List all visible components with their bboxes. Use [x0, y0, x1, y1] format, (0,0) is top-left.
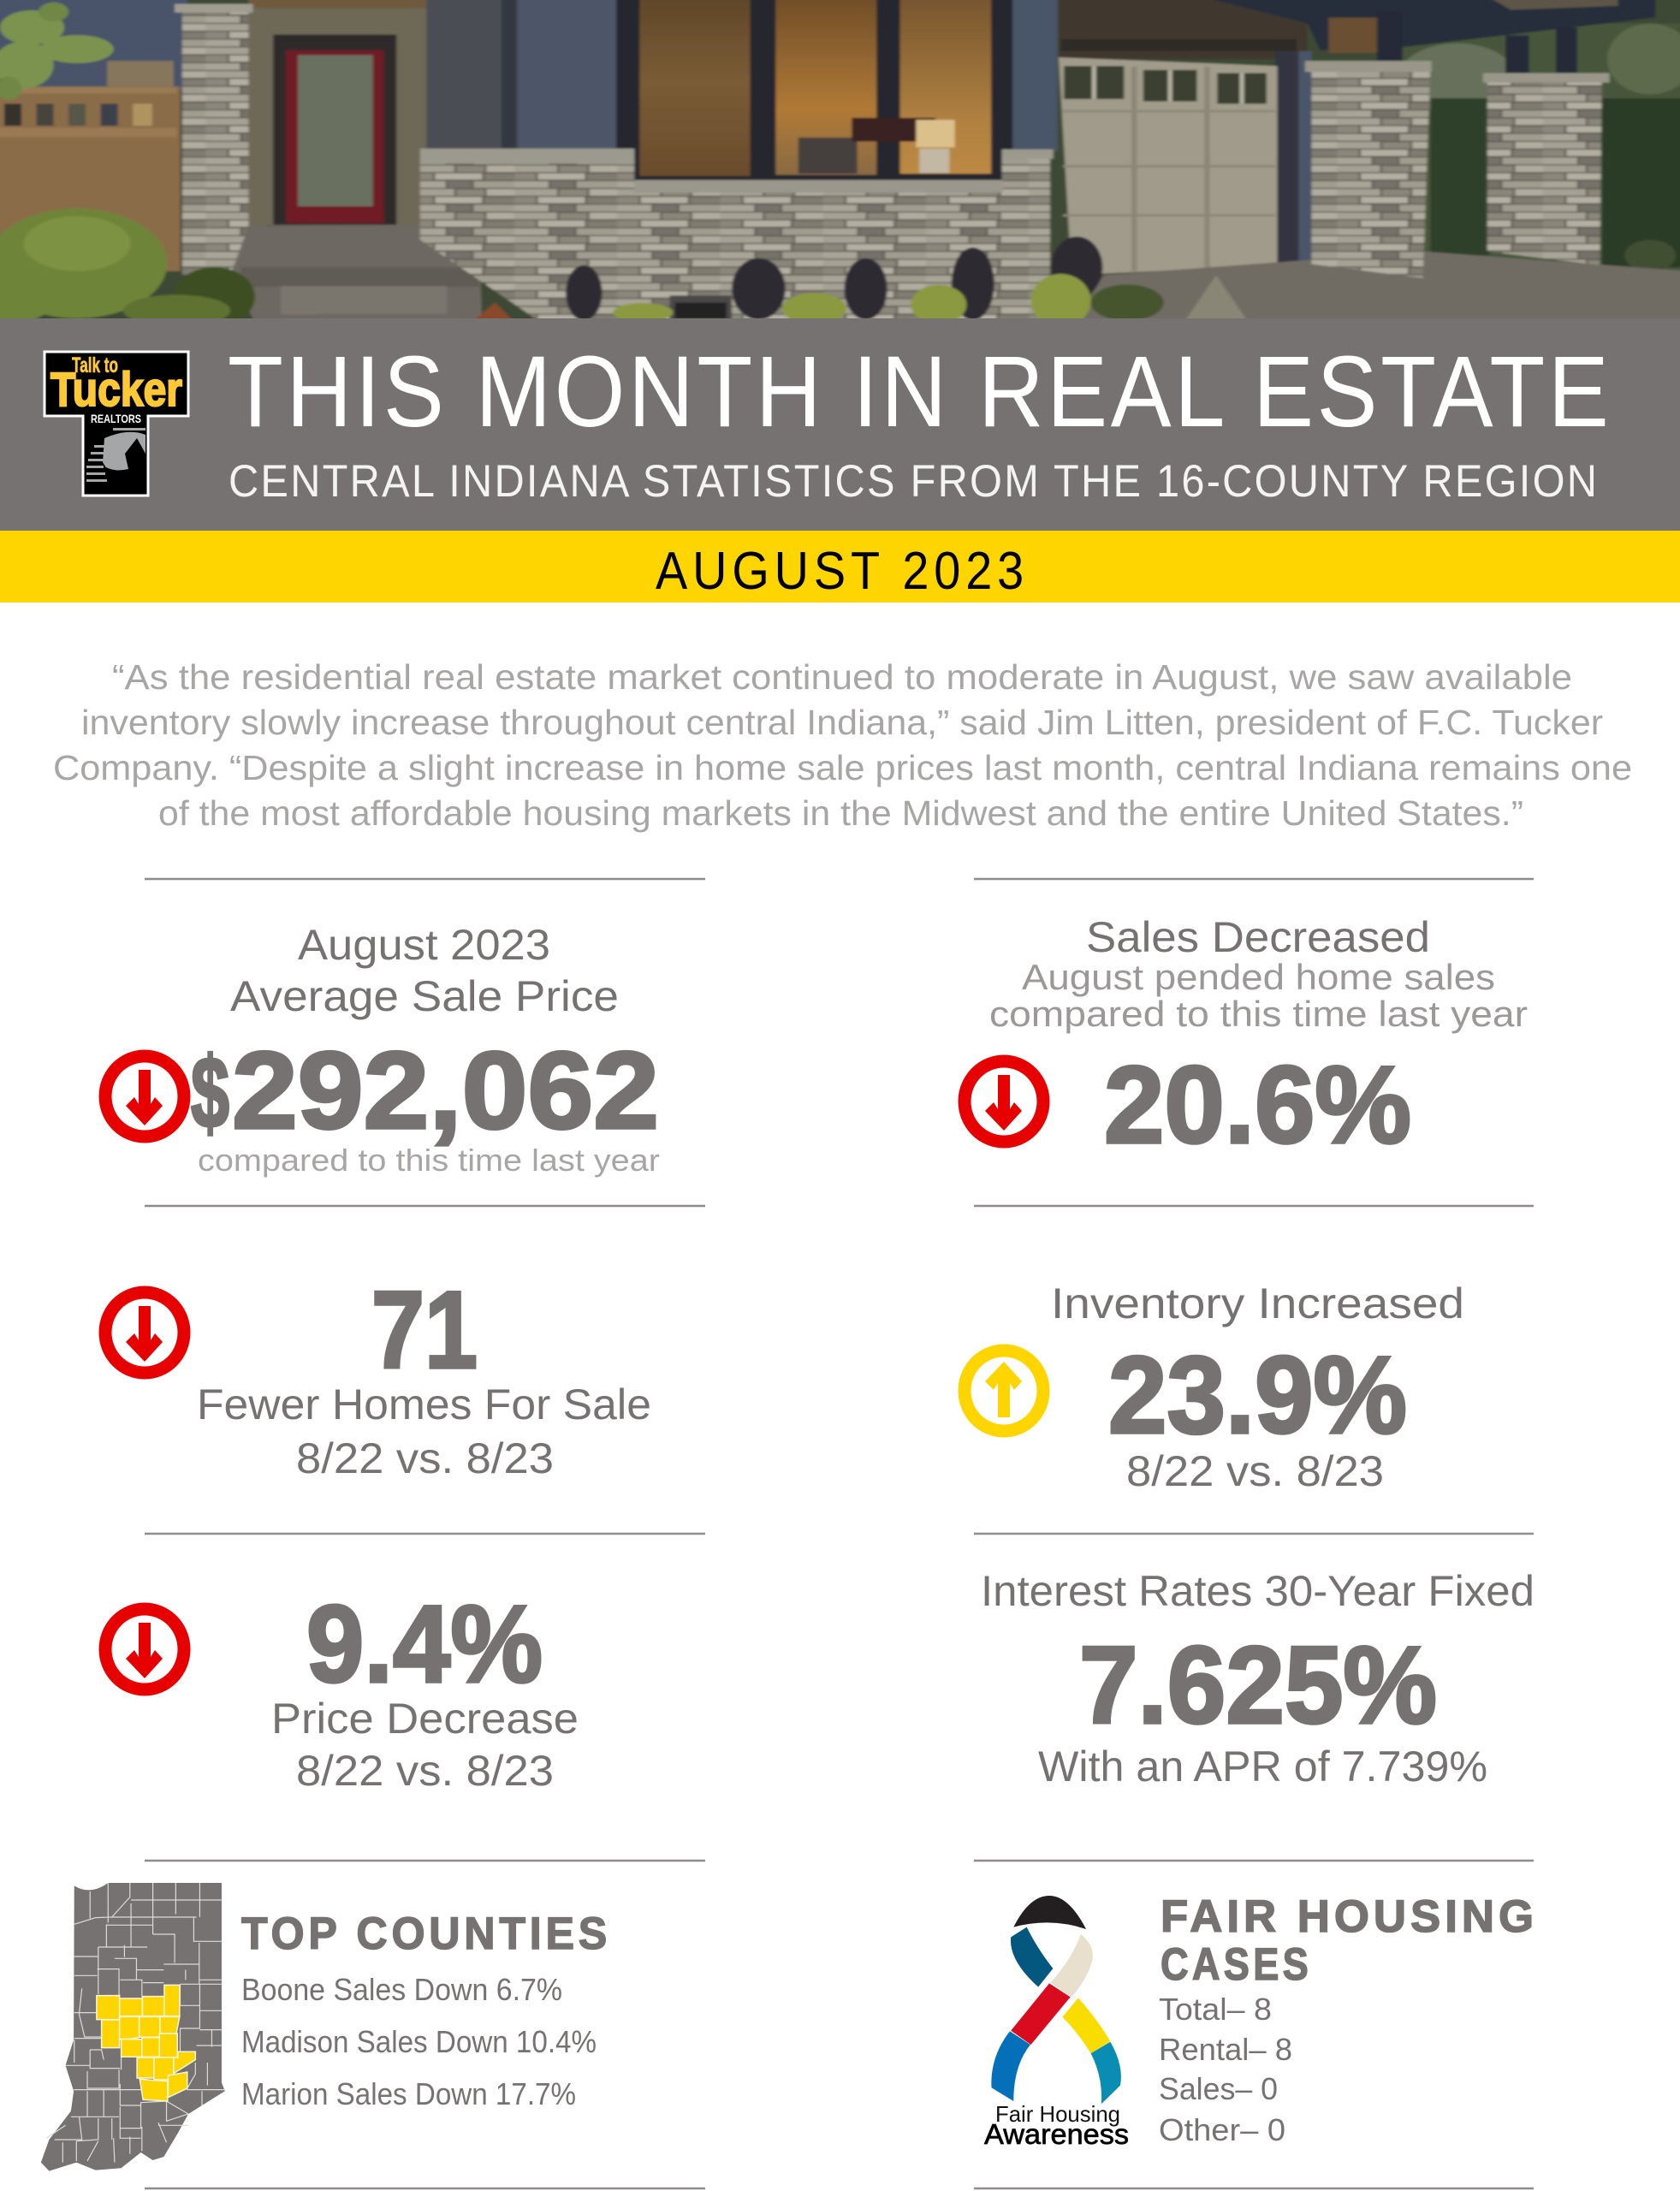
panel: average sale price: compared to this time last year	[198, 1143, 660, 1178]
percent value: 20.6%	[1104, 1044, 1411, 1167]
panel: price decrease	[105, 1583, 579, 1795]
panel: fair housing cases: Total– 8	[1159, 1992, 1272, 2027]
panel: fair housing cases: Sales– 0	[1159, 2071, 1278, 2106]
panel: sales decreased: compared to this time last year	[989, 994, 1528, 1034]
panel: average sale price: August 2023	[298, 921, 550, 969]
panel: sales decreased	[965, 913, 1528, 1167]
logo: Talk to Tucker Realtors	[45, 352, 188, 496]
icon: yellow up arrow	[965, 1351, 1043, 1431]
panel: fair housing cases: Other– 0	[1159, 2112, 1285, 2147]
heading	[1161, 1891, 1538, 1990]
intro quote: “As the residential real estate market continued to moderate in August, we saw available	[112, 657, 1572, 697]
panel: fair housing cases	[984, 1891, 1538, 2150]
panel: sales decreased: Sales Decreased	[1086, 913, 1430, 961]
panel: inventory increased: 8/22 vs. 8/23	[1126, 1447, 1384, 1495]
panel: fewer homes for sale: 8/22 vs. 8/23	[296, 1434, 554, 1482]
icon: red down arrow	[105, 1056, 184, 1137]
header band	[0, 318, 1680, 531]
intro quote: of the most affordable housing markets in the Midwest and the entire United States.”	[158, 793, 1523, 833]
icon: red down arrow	[965, 1061, 1043, 1142]
panel: fewer homes for sale: Fewer Homes For Sale	[197, 1381, 651, 1428]
panel: interest rates: Interest Rates 30-Year Fixed	[981, 1567, 1535, 1615]
icon: fair housing ribbon: Awareness	[984, 2118, 1129, 2150]
date bar	[0, 531, 1680, 603]
date: AUGUST 2023	[656, 542, 1024, 601]
intro quote: Company. “Despite a slight increase in home sale prices last month, central Indiana remains one	[53, 748, 1632, 787]
percent value: 9.4%	[306, 1583, 543, 1706]
subtitle: CENTRAL INDIANA STATISTICS FROM THE 16-COUNTY REGION	[229, 455, 1597, 506]
heading: TOP COUNTIES	[241, 1909, 611, 1959]
logo: Talk to Tucker Realtors: REALTORS	[91, 412, 141, 425]
percent value: 23.9%	[1108, 1334, 1407, 1457]
panel: inventory increased: Inventory Increased	[1051, 1280, 1464, 1327]
price value: $	[191, 1036, 229, 1149]
panel: fewer homes for sale	[105, 1269, 651, 1482]
panel: average sale price: Average Sale Price	[230, 972, 619, 1020]
panel: top counties: Marion Sales Down 17.7%	[241, 2076, 576, 2111]
panel: top counties: Boone Sales Down 6.7%	[241, 1972, 562, 2007]
panel: fair housing cases: Rental– 8	[1159, 2032, 1292, 2067]
panel: price decrease: Price Decrease	[271, 1695, 579, 1743]
logo: Talk to Tucker Realtors: Tucker	[50, 362, 182, 416]
heading: CASES	[1161, 1939, 1312, 1990]
icon: red down arrow	[105, 1292, 184, 1373]
intro quote: inventory slowly increase throughout central Indiana,” said Jim Litten, president of F.C. Tucker	[81, 703, 1603, 742]
panel: interest rates: With an APR of 7.739%	[1038, 1743, 1487, 1790]
icon: red down arrow	[105, 1609, 184, 1689]
panel: top counties: Madison Sales Down 10.4%	[241, 2024, 597, 2059]
hero photo: house exterior	[0, 0, 1680, 342]
value 71: 71	[371, 1269, 478, 1392]
panel: interest rates	[981, 1567, 1535, 1790]
panel: inventory increased	[965, 1280, 1464, 1495]
main title: THIS MONTH IN REAL ESTATE	[228, 335, 1609, 448]
icon: fair housing ribbon	[984, 1896, 1129, 2150]
heading: FAIR HOUSING	[1161, 1891, 1538, 1942]
intro quote	[53, 657, 1632, 833]
panel: sales decreased: August pended home sales	[1022, 957, 1495, 997]
icon: fair housing ribbon: Fair Housing	[995, 2101, 1120, 2127]
rate value: 7.625%	[1079, 1624, 1437, 1747]
panel: price decrease: 8/22 vs. 8/23	[296, 1747, 554, 1795]
Indiana county map	[41, 1883, 225, 2171]
panel: top counties	[41, 1883, 611, 2171]
panel: average sale price	[105, 921, 660, 1178]
panel: average sale price: 292,062	[232, 1030, 659, 1152]
logo: Talk to Tucker Realtors: Talk to	[72, 353, 118, 377]
